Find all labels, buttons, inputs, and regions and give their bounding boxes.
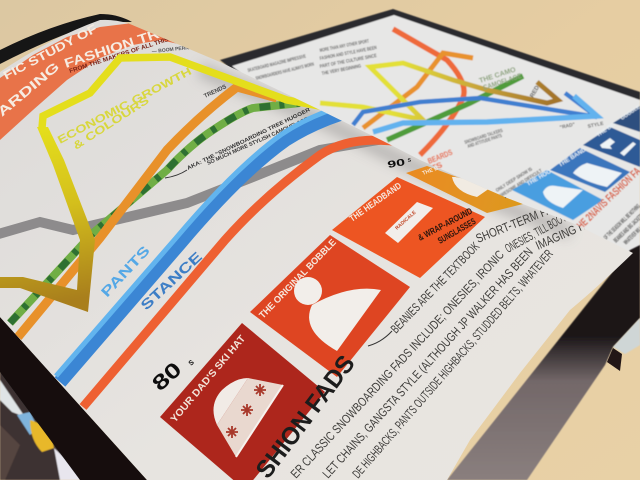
body text: classic fads: ER CLASSIC SNOWBOARDING FADS INCLUDE; ONESIES, IRONIC [288, 248, 507, 480]
heading: 80s: S [188, 359, 196, 367]
back page labels: THE CAMO [478, 66, 517, 85]
lower left underlying magazine photo [0, 365, 90, 480]
right magazine page, back [220, 9, 640, 260]
label: trends: TRENDS [203, 84, 228, 100]
line: dark blue pants [353, 93, 597, 125]
back page labels: AND ATTITUDE PANTS [467, 133, 503, 150]
back page labels: ITS [427, 160, 444, 174]
back page labels: ONLY DEEP SNOW IS [495, 166, 534, 194]
label: barely visible: — BOOM PERIOD [152, 45, 195, 55]
square: the original bobble [250, 235, 410, 377]
title banner [0, 21, 183, 140]
line: orange [363, 53, 473, 128]
square: the beak: THE BEAK [596, 118, 622, 139]
headband icon: RADICALE [394, 209, 418, 231]
intro paragraph: PART OF THE CULTURE SINCE [319, 53, 378, 70]
intro paragraph: SKATEBOARD MAGAZINE IMPRESSIVE [247, 54, 307, 74]
square: orange 90s trend [406, 166, 523, 213]
intro paragraph [247, 39, 378, 82]
heading: 80s: 80 [148, 358, 186, 396]
lower right grey magazine page [447, 245, 640, 480]
heading: economic growth and colours [56, 66, 194, 153]
heading: 90s: S [407, 157, 412, 164]
line: orange [18, 87, 277, 337]
square: the headband [332, 177, 485, 278]
line: green [387, 76, 523, 140]
sunglasses label: SUNGLASSES [436, 216, 477, 246]
intro paragraph: FASHION AND STYLE HAVE BEEN [319, 45, 378, 62]
subtitle text: FROM THE MAKERS OF ALL THIS [69, 37, 170, 75]
heading: 80s [152, 360, 194, 390]
heading: economic growth and colours: & COLOURS [71, 95, 151, 153]
page paper [232, 15, 640, 260]
annotation: only deep snow pointer [504, 197, 506, 198]
body text: classic fads: BEANIES ARE THE TEXTBOOK [388, 239, 483, 336]
label: stance: STANCE [137, 248, 205, 313]
blue fashion squares [512, 104, 640, 220]
line: yellow economic growth [0, 57, 330, 312]
label: pants: PANTS [97, 242, 153, 300]
back page labels: "RAD" [559, 122, 576, 131]
line: stance red [393, 29, 464, 155]
line: green camo [10, 103, 300, 323]
title banner: FASHION TR [62, 26, 162, 71]
back page labels: BEARDS [426, 148, 454, 166]
back page labels: SNOWBOARD TALKERS [464, 128, 504, 146]
square: the hook: THE HOOK [526, 166, 557, 188]
headband icon [385, 202, 433, 243]
back page labels: AWESOME AND DIFFICULT [498, 168, 543, 200]
body text: classic fads: LET CHAINS, GANGSTA STYLE (ALTHOUGH JP WALKER HAS BEEN [320, 245, 536, 480]
body text: classic fads: IMAGING IT) [534, 216, 592, 253]
back page lines chart [320, 29, 597, 155]
body text: classic fads: SHORT-TERM FA [474, 202, 555, 246]
line: orange stance [83, 140, 400, 407]
line: yellow to brown [320, 63, 558, 120]
hat icon [213, 378, 283, 457]
stacked papers at right edge [613, 318, 640, 354]
back page labels [426, 66, 605, 200]
annotation: aka snowboarding: SO MUCH MORE STYLISH CAMOUFLAGE [206, 116, 310, 167]
line: light blue stance [373, 96, 597, 132]
body text: classic fads: ONESIES, TILL BOOTS [503, 208, 572, 256]
line: grey [0, 138, 390, 235]
square: your dad's ski hat [160, 323, 325, 480]
annotation: aka snowboarding [165, 107, 311, 178]
title text: FIC STUDY OF [1, 21, 99, 83]
sunglasses label [418, 208, 476, 244]
back page labels: CAMOFLAGE [482, 73, 523, 92]
annotation: aka snowboarding: AKA: THE "SNOWBOARDING TREE HUGGER [186, 107, 311, 172]
heading: fashion fads: SHION FADS [250, 350, 361, 480]
heading: 90s [388, 158, 411, 168]
square: the shred: THE BAND [558, 147, 588, 169]
small black block [607, 348, 622, 371]
right page body text [603, 203, 640, 246]
black back cover band [0, 317, 147, 480]
bobble hat icon [294, 277, 381, 351]
black top edge of cover [0, 14, 132, 64]
intro paragraph: SNOWBOARDERS HAVE ALWAYS WORN [255, 62, 315, 82]
heading: economic growth and colours: ECONOMIC GROWTH [56, 66, 194, 147]
bobble label: THE ORIGINAL BOBBLE [257, 237, 339, 321]
back page labels: RED [530, 84, 541, 99]
back page labels: STYLE [587, 121, 605, 130]
intro paragraph: MORE THAN ANY OTHER SPORT [319, 39, 369, 54]
square: orange 90s trend: THE BUTT [422, 162, 450, 177]
hat label: YOUR DAD'S SKI HAT [169, 334, 248, 425]
line: blue pants [56, 108, 340, 382]
headband label: THE HEADBAND [347, 180, 403, 224]
sunglasses label: & WRAP-AROUND [416, 206, 474, 243]
intro paragraph: THE VERY BEGINNING [321, 63, 362, 77]
heading: 90s: 90 [386, 156, 406, 170]
page cover border [220, 9, 640, 260]
fold shading [200, 70, 570, 232]
